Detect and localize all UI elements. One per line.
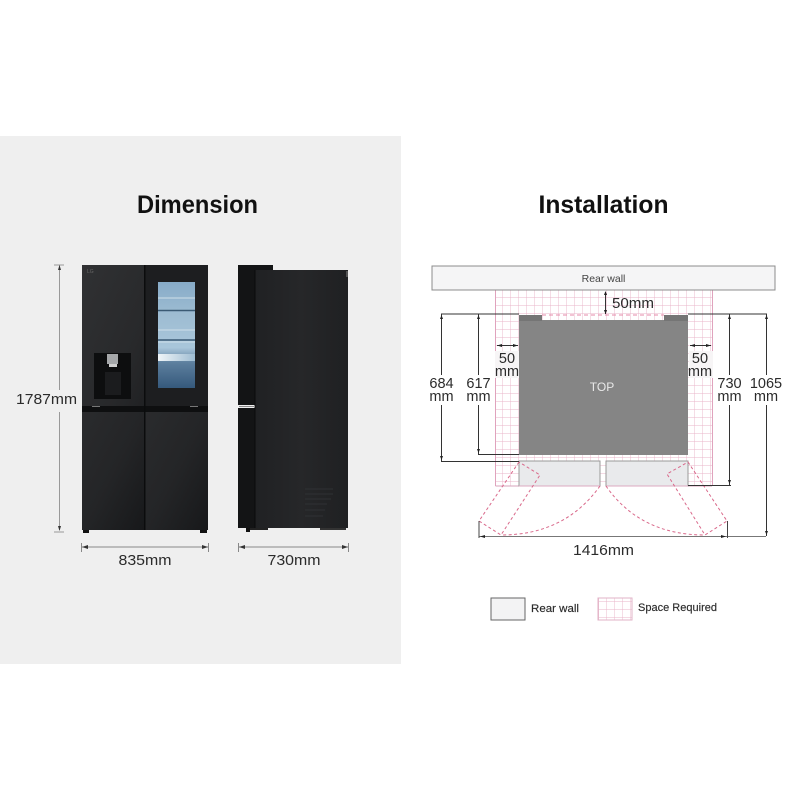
label: 684mm: mm bbox=[429, 389, 454, 405]
fridge top view bbox=[519, 315, 688, 455]
legend: rear wall bbox=[491, 598, 579, 620]
label: 1065mm: 1065 bbox=[750, 376, 782, 392]
label: 617mm bbox=[466, 376, 491, 405]
fridge front view bbox=[82, 265, 208, 533]
label: 730mm bbox=[717, 376, 742, 405]
legend: space required bbox=[598, 598, 717, 620]
depth dimension: 730mm bbox=[238, 543, 348, 569]
rear wall bar: Rear wall bbox=[582, 273, 625, 285]
width dimension: 835mm: 835mm bbox=[118, 552, 172, 569]
label: 50mm top: 50mm bbox=[612, 296, 654, 312]
fridge side view bbox=[238, 265, 348, 532]
space required grid bbox=[496, 290, 712, 486]
doors bbox=[519, 461, 688, 486]
rear wall bar bbox=[432, 266, 775, 290]
width dimension: 835mm bbox=[82, 543, 208, 569]
label: 50mm left bbox=[495, 351, 519, 380]
label: 50mm left: 50 bbox=[499, 351, 515, 367]
dispenser bbox=[94, 353, 131, 399]
label: 730mm: mm bbox=[717, 389, 742, 405]
depth dimension: 730mm: 730mm bbox=[268, 552, 320, 569]
label: 50mm left: mm bbox=[495, 364, 519, 380]
label: 684mm bbox=[429, 376, 454, 405]
label: 50mm right: 50 bbox=[692, 351, 708, 367]
icon: LG logo: LG bbox=[87, 269, 94, 275]
legend: rear wall: Rear wall bbox=[531, 603, 579, 615]
label: 50mm right: mm bbox=[688, 364, 712, 380]
door swing paths bbox=[479, 462, 727, 535]
panel: dimension background bbox=[0, 136, 401, 664]
height dimension: 1787mm bbox=[16, 265, 77, 532]
height dimension: 1787mm: 1787mm bbox=[16, 391, 77, 408]
label: 50mm right bbox=[688, 351, 713, 380]
label: 617mm: mm bbox=[466, 389, 491, 405]
heading: Installation: Installation bbox=[538, 191, 668, 219]
label: 1065mm: mm bbox=[754, 389, 778, 405]
label: 617mm: 617 bbox=[466, 376, 491, 392]
glass window bbox=[158, 282, 195, 388]
fridge top view: TOP bbox=[590, 380, 614, 394]
installation plan diagram bbox=[429, 266, 782, 559]
label: 1416mm: 1416mm bbox=[573, 543, 634, 559]
label: 684mm: 684 bbox=[429, 376, 454, 392]
label: 730mm: 730 bbox=[717, 376, 742, 392]
legend bbox=[491, 598, 717, 620]
legend: space required: Space Required bbox=[638, 602, 717, 614]
clearance lines bbox=[441, 292, 767, 538]
label: 1065mm bbox=[750, 376, 782, 405]
heading: Dimension: Dimension bbox=[137, 191, 258, 219]
